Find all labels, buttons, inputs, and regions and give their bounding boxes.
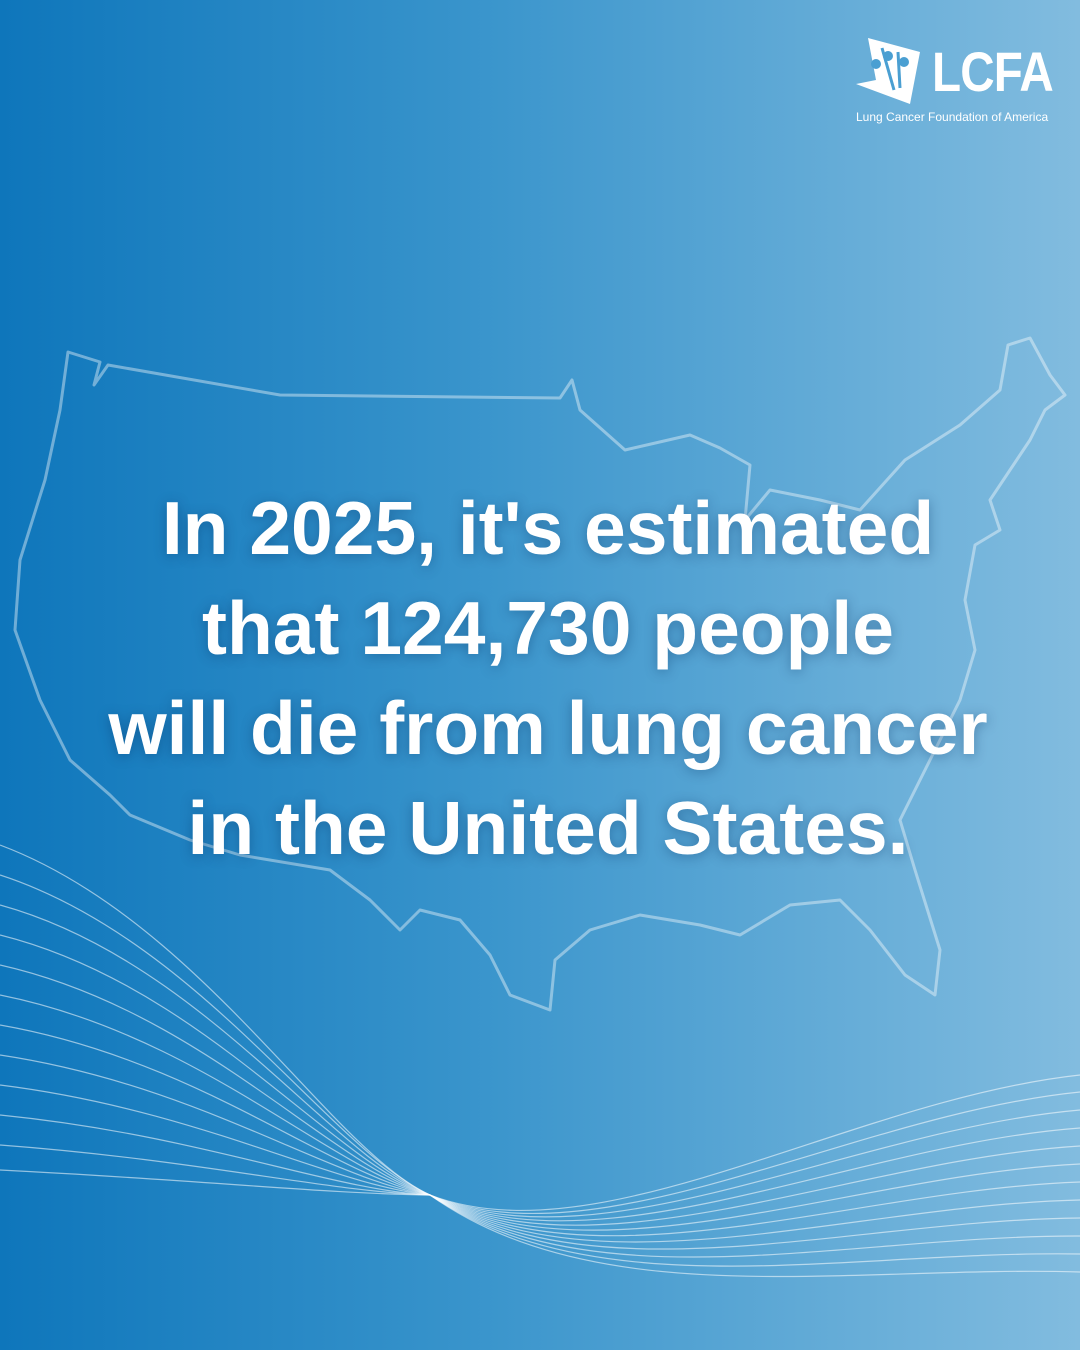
icon: logo mark	[856, 38, 920, 104]
logo tagline: Lung Cancer Foundation of America	[856, 110, 1048, 124]
headline	[106, 486, 990, 870]
headline: will die from lung cancer	[108, 686, 988, 770]
headline: that 124,730 people	[202, 586, 894, 670]
logo text: LCFA	[932, 40, 1053, 103]
headline: In 2025, it's estimated	[162, 486, 934, 570]
logo: LCFA	[856, 38, 1053, 124]
headline: in the United States.	[188, 786, 908, 870]
